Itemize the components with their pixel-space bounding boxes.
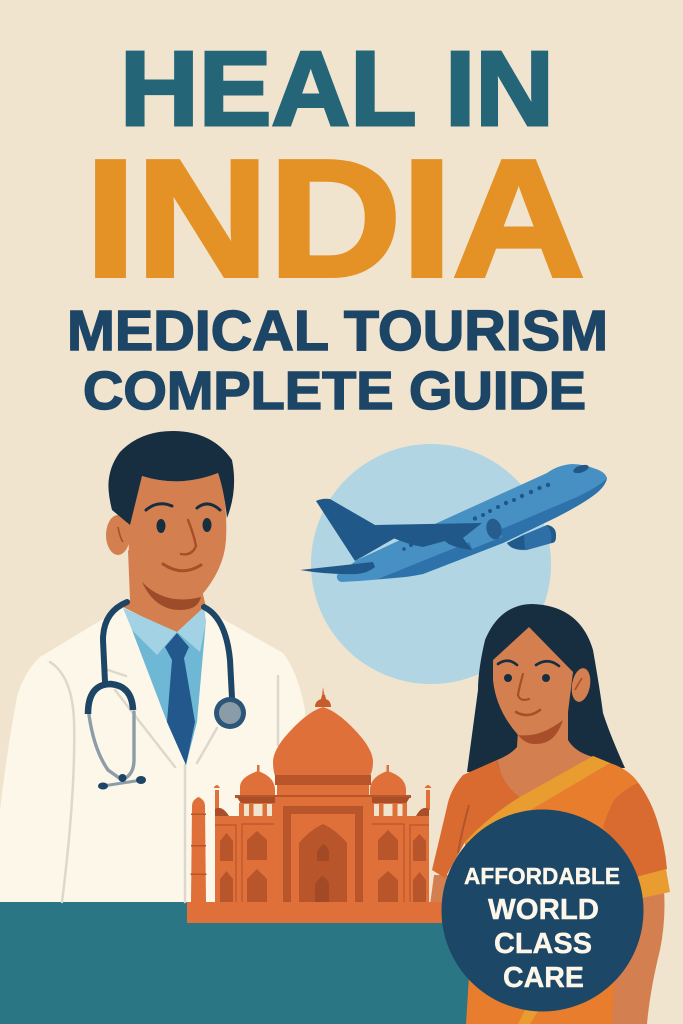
title: india: INDIA	[85, 126, 585, 312]
cornice and canopies	[235, 795, 411, 798]
stethoscope chestpiece	[214, 697, 246, 729]
dome drum	[275, 775, 371, 785]
fuselage	[337, 464, 607, 582]
teal base band	[0, 902, 480, 1024]
doctor coat	[0, 607, 312, 902]
badge	[442, 810, 644, 1012]
airplane	[300, 463, 607, 582]
central iwan	[283, 806, 363, 902]
fuselage belly	[378, 478, 607, 579]
woman patient	[430, 604, 670, 1024]
sleeve band	[636, 869, 670, 898]
badge: CARE	[503, 962, 584, 994]
shirt collar	[123, 608, 177, 655]
saree sash	[465, 756, 610, 845]
side panels and windows	[215, 824, 429, 902]
sky circle	[311, 444, 551, 684]
doctor	[0, 431, 312, 902]
doctor face	[128, 473, 226, 608]
side domes	[240, 771, 275, 797]
subtitle: medical tourism: MEDICAL TOURISM	[67, 299, 608, 363]
cabin windows	[402, 483, 550, 551]
woman face features	[498, 661, 559, 666]
subtitle: complete guide: COMPLETE GUIDE	[83, 361, 586, 421]
woman neck and chest	[497, 700, 593, 797]
chin shadow	[142, 582, 201, 610]
stethoscope	[88, 602, 232, 790]
badge: WORLD	[488, 894, 599, 926]
main dome	[273, 707, 373, 776]
near engine	[467, 523, 502, 549]
badge circle	[442, 810, 644, 1012]
shirt	[132, 620, 206, 765]
woman ear	[569, 667, 593, 703]
face features	[146, 504, 220, 510]
coat fold lines	[50, 662, 278, 902]
stabilizer	[300, 562, 375, 574]
right sleeve	[603, 783, 667, 878]
badge text: AFFORDABLE	[464, 863, 620, 889]
blouse left	[432, 760, 520, 878]
small minarets	[214, 785, 220, 810]
lone minaret	[191, 797, 206, 902]
pavilion columns	[239, 803, 276, 817]
woman face	[493, 627, 573, 745]
woman hair	[467, 604, 625, 772]
tail fin	[316, 499, 395, 561]
necktie	[165, 633, 195, 765]
near wing	[375, 523, 482, 550]
taj plinth	[187, 902, 442, 923]
ear	[106, 515, 130, 555]
title: heal in: HEAL IN	[120, 30, 554, 148]
doctor neck	[123, 550, 206, 634]
saree	[465, 756, 652, 1024]
woman arm	[600, 890, 664, 1024]
badge: CLASS	[494, 928, 592, 960]
taj mahal	[187, 687, 442, 923]
cockpit window	[572, 463, 590, 475]
far engine	[507, 525, 556, 550]
doctor hair	[108, 431, 234, 525]
main building	[215, 816, 429, 902]
